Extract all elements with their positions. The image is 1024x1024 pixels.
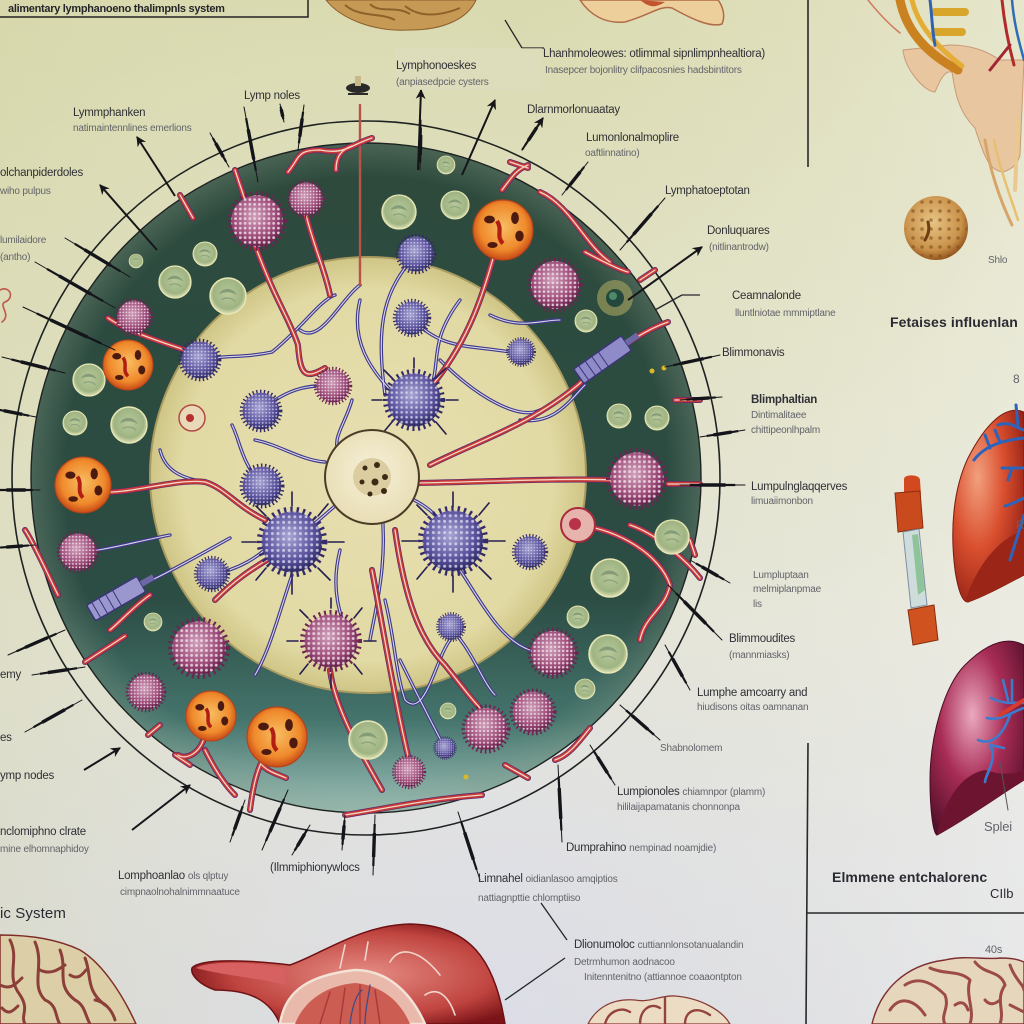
organ: brain bottom left <box>0 935 136 1024</box>
main circular diagram <box>12 105 720 835</box>
heading: lower right panel: CIlb <box>990 886 1014 901</box>
dark tissue disc <box>31 143 701 813</box>
panel dividers <box>806 0 1024 1024</box>
label: Dumprahino: Dumprahino nempinad noamjdie) <box>566 842 716 854</box>
label: olchanpiderdoles: wiho pulpus <box>0 186 51 197</box>
label: Lumphe amcoarry <box>697 687 808 713</box>
callout labels: bottom <box>0 786 765 983</box>
label: Lumonlonalmoplire: oaftlinnatino) <box>585 148 639 159</box>
label: Lumpulnglaqqerves: limuaiimonbon <box>751 496 813 507</box>
label: lumilaidore: (antho) <box>0 252 30 263</box>
label: lymp nodes: ymp nodes <box>0 770 55 782</box>
label: Lumpulnglaqqerves: Lumpulnglaqqerves <box>751 481 848 493</box>
yellow inner disc <box>150 257 586 693</box>
label: Lumonlonalmoplire: Lumonlonalmoplire <box>586 132 679 144</box>
label: Blimmonavis: Blimmonavis <box>722 347 785 359</box>
outer ring <box>12 121 720 835</box>
top tan organ fragment (right of centre) <box>580 0 724 25</box>
label: Dlionumoloc: Initenntenitno (attiannoe coaaontpton <box>584 972 742 983</box>
label: es: es <box>0 732 12 744</box>
label: Lymphanken <box>73 107 192 134</box>
label: Lumpionoles <box>617 786 765 813</box>
label: Blimmoudites: Blimmoudites <box>729 633 796 645</box>
label: Lumpulnglaqqerves <box>751 481 848 507</box>
label: Lumonlonalmoplire <box>585 132 679 159</box>
icon: test tube <box>895 475 938 645</box>
label: Ceamnalonde: lluntlniotae mmmiptlane <box>735 308 836 319</box>
label: Lymphonoeskes <box>396 60 489 88</box>
label: Lumpluptaan: Lumpluptaan <box>753 570 809 581</box>
top tan organ fragment (centre) <box>326 0 476 30</box>
label: Blimphaltian: chittipeonlhpalm <box>751 425 820 436</box>
label: Lymphanken: Lymmphanken <box>73 107 145 119</box>
label: Blimphaltian <box>751 394 820 436</box>
marker 40s: 40s <box>985 944 1003 956</box>
label: Lumpionoles: Lumpionoles chiamnpor (plamm) <box>617 786 765 798</box>
label: Ceamnalonde <box>732 290 836 319</box>
label: lumilaidore: lumilaidore <box>0 235 47 246</box>
organ: stomach <box>192 924 505 1024</box>
heading: lower right panel: Elmmene entchalorenc <box>832 869 987 885</box>
label: olchanpiderdoles <box>0 167 83 197</box>
marker 8: 8 <box>1013 372 1020 386</box>
label: Ilmmiphionywlocs: (Ilmmiphionywlocs <box>270 862 360 874</box>
label: Sphe: Shlo <box>988 255 1008 266</box>
centre hub <box>325 430 419 524</box>
label: Limnahel <box>478 873 618 904</box>
syringe: left <box>87 569 158 621</box>
label: Lhanhmoleowes: Lhanhmoleowes: otlimmal sipnlimpnhealtiora) <box>543 48 765 60</box>
syringe: right <box>574 328 643 384</box>
label: Donluquares: Donluquares <box>707 225 770 237</box>
top valve icon <box>346 76 370 94</box>
label: lumilaidore <box>0 235 47 263</box>
organ: crimson spleen <box>930 641 1024 835</box>
label: Dlarnmorlonuaatay: Dlarnmorlonuaatay <box>527 104 620 116</box>
label: Lhanhmoleowes <box>543 48 765 76</box>
label: Lumphe amcoarry: Lumphe amcoarry and <box>697 687 807 699</box>
label: nclomiphno clrate: nclomiphno clrate <box>0 826 86 838</box>
purple vessels <box>60 254 585 748</box>
label: Lymphatoeptotan: Lymphatoeptotan <box>665 185 750 197</box>
label: Dlionumoloc <box>574 939 743 983</box>
green cells <box>63 156 689 759</box>
long spikes on large purple cells <box>242 358 505 688</box>
label: Lymphonoeskes: (anpiasedpcie cysters <box>396 77 489 88</box>
label: spleen: Splei <box>984 819 1012 834</box>
organ: orange-red liver <box>953 405 1024 602</box>
heading: factors panel: Fetaises influenlan <box>890 314 1018 330</box>
label: Blimphaltian: Dintimalitaee <box>751 410 807 421</box>
pale red cells <box>179 405 595 542</box>
orange cells <box>55 200 533 767</box>
label: emy: emy <box>0 669 21 681</box>
callout labels: top <box>395 48 765 197</box>
label: Limnahel: nattiagnpttie chlomptiiso <box>478 893 581 904</box>
small follicle <box>597 280 633 316</box>
thin leaders <box>505 20 700 1000</box>
red vessels <box>25 138 700 815</box>
purple spiky cells <box>180 235 547 759</box>
heading: ic System: ic System <box>0 905 66 922</box>
label: Lhanhmoleowes: Inasepcer bojonlitry clifpacosnies hadsbintitors <box>545 65 742 76</box>
label: Ceamnalonde: Ceamnalonde <box>732 290 801 302</box>
organ: brain bottom right <box>872 958 1024 1024</box>
callout labels: left <box>0 90 300 855</box>
anatomy: spine and nerve bundle, top right <box>868 0 1024 225</box>
label: Blimmoudites <box>729 633 796 661</box>
callout leaders <box>0 20 745 1000</box>
label: Donluquares: (nitlinantrodw) <box>709 242 769 253</box>
label: Lumpluptaan <box>753 570 822 610</box>
label: Lumpionoles: hililaijapamatanis chonnonpa <box>617 802 740 813</box>
label: Limnahel: Limnahel oidianlasoo amqiptios <box>478 873 618 885</box>
pale label patch <box>395 48 542 90</box>
label: nclomiphno clrate: mine elhomnaphidoy <box>0 844 89 855</box>
title strip (cropped) <box>0 0 308 17</box>
label: olchanpiderdoles: olchanpiderdoles <box>0 167 83 179</box>
label: Blimphaltian: Blimphaltian <box>751 394 817 406</box>
label: Lumphe amcoarry: hiudisons oitas oamnanan <box>697 702 808 713</box>
label: Lumpluptaan: lis <box>753 599 762 610</box>
label: Lumpluptaan: melmiplanpmae <box>753 584 822 595</box>
callout labels: right <box>660 225 848 754</box>
label: Lymphonoeskes: Lymphonoeskes <box>396 60 477 72</box>
label: Blimmoudites: (mannmiasks) <box>729 650 789 661</box>
label: Shabnolomem: Shabnolomem <box>660 743 722 754</box>
label: Lomphoanlao <box>118 870 240 898</box>
label: Lomphoanlao: cimpnaolnohalnimmnaatuce <box>120 887 240 898</box>
central thin vessel <box>359 105 361 285</box>
icon: tan ball cell <box>904 196 968 260</box>
organ: brain bottom centre <box>588 996 730 1024</box>
magenta spiky cells <box>58 181 665 788</box>
label: Lymp nodes: Lymp noles <box>244 90 300 102</box>
label: Dlionumoloc: Dlionumoloc cuttiannlonsotanualandin <box>574 939 743 951</box>
arrows with heads <box>84 90 702 830</box>
title strip (cropped): alimentary lymphanoeno thalimpnls system <box>8 3 225 15</box>
label: Lymphanken: natimaintennlines emerlions <box>73 123 192 134</box>
label: Lomphoanlao: Lomphoanlao ols qlptuy <box>118 870 228 882</box>
label: nclomiphno clrate <box>0 826 89 855</box>
label: Donluquares <box>707 225 770 253</box>
label: Dlionumoloc: Detrmhumon aodnacoo <box>574 957 675 968</box>
small red squiggle at left edge <box>0 289 10 322</box>
yellow granules <box>464 366 666 780</box>
heading: lower right panel <box>832 869 1014 901</box>
